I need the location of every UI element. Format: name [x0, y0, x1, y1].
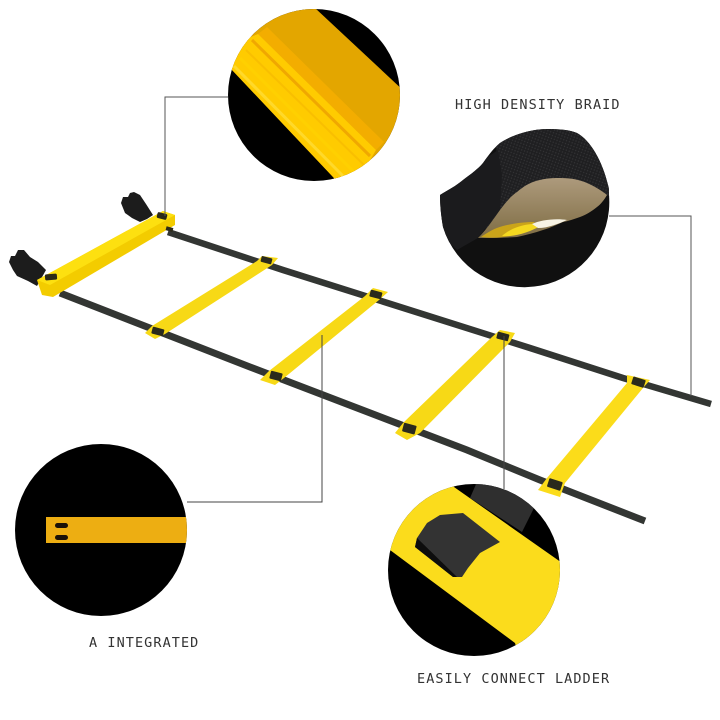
straps: end loops [9, 192, 153, 286]
connector line: top detail [165, 97, 228, 216]
label: a integrated: A INTEGRATED [89, 635, 199, 651]
rung 5 [538, 375, 650, 497]
connector line: braid detail [609, 216, 691, 396]
rung 4 [395, 330, 515, 440]
connector line: ladder connection detail [503, 336, 505, 489]
label: high density braid: HIGH DENSITY BRAID [455, 97, 621, 113]
rung 3 [260, 288, 388, 385]
rail: far strap [168, 232, 711, 404]
label: easily connect ladder: EASILY CONNECT LADDER [417, 671, 610, 687]
rail: near strap [60, 293, 645, 521]
detail circle: high density braid [440, 129, 610, 288]
agility ladder [9, 192, 711, 521]
detail circle: connect ladder [388, 484, 560, 656]
connector line: integrated detail [187, 335, 322, 502]
detail circle: rung surface [228, 9, 400, 181]
rung 2 [145, 256, 278, 339]
detail circle: integrated rung [15, 444, 188, 616]
rung 1: thick end bar [37, 211, 175, 297]
